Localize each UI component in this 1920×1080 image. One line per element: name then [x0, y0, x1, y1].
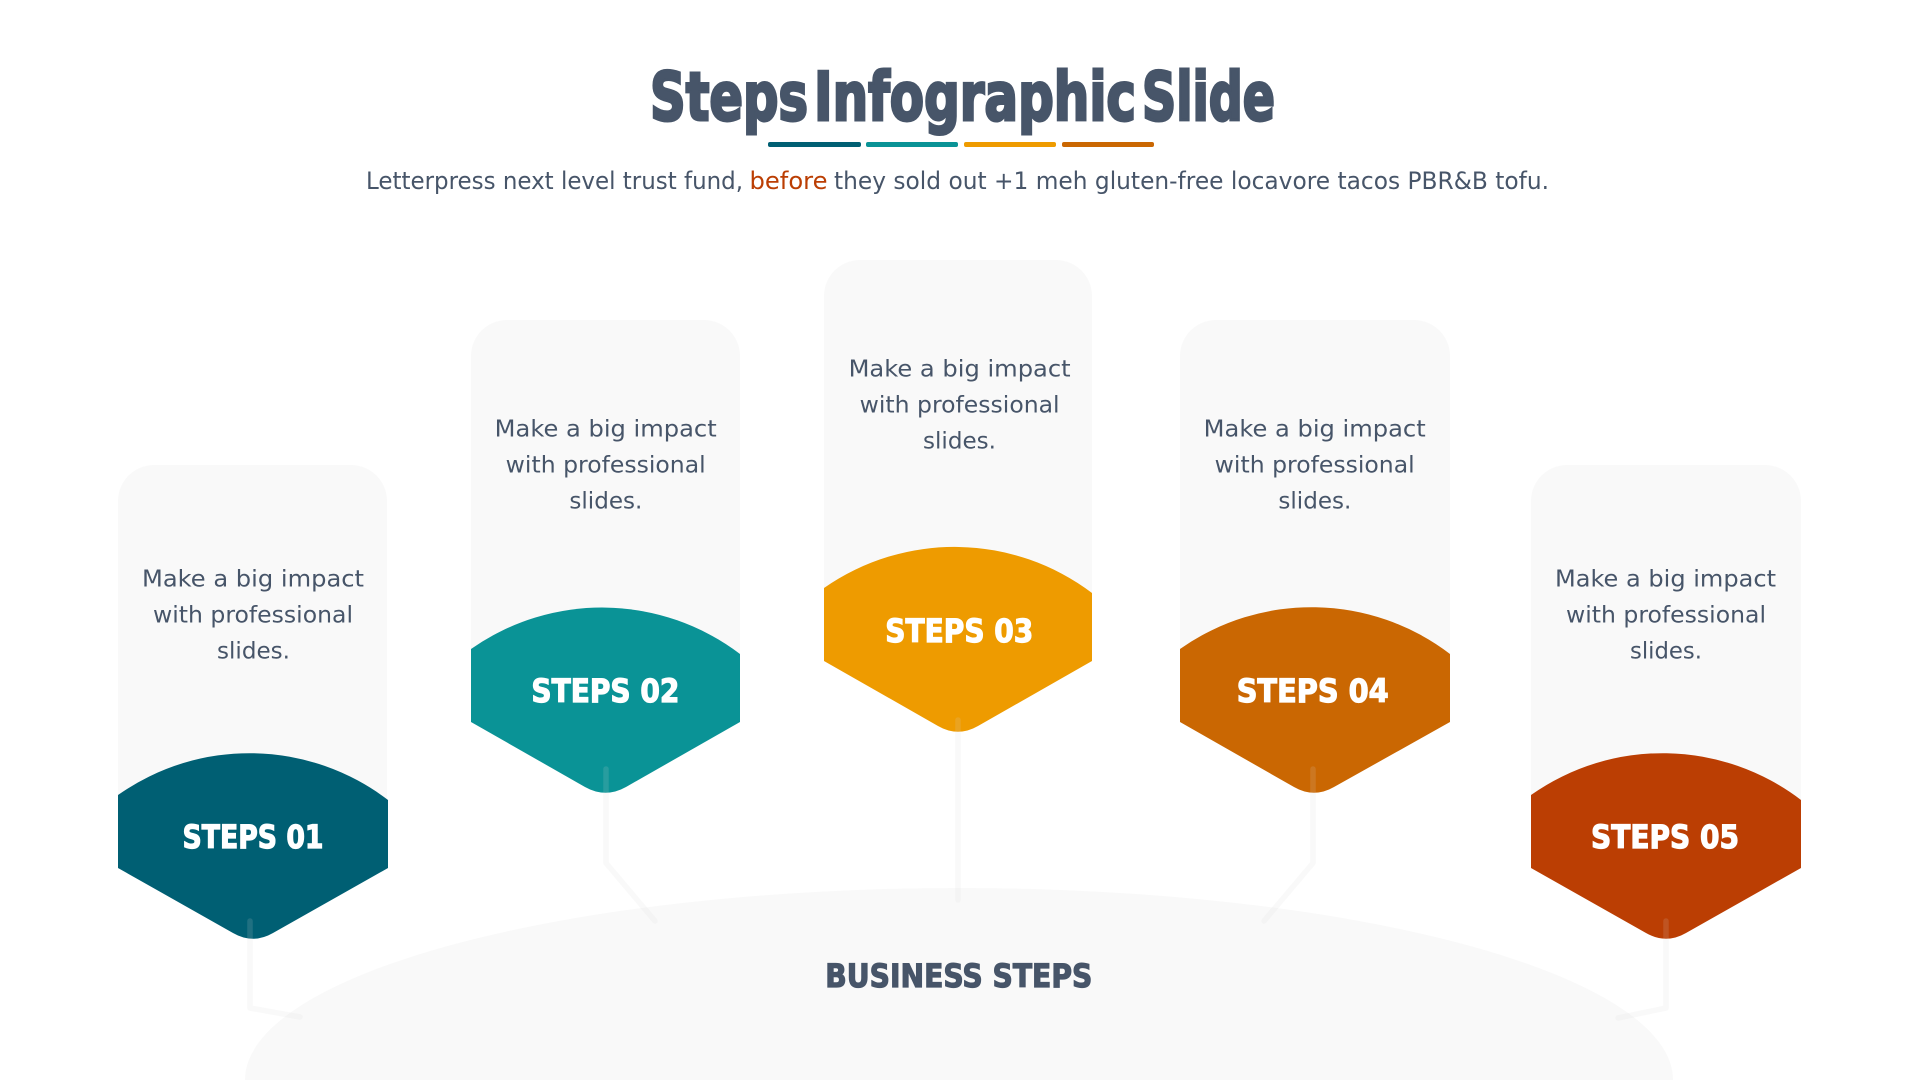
step 01 badge: [118, 753, 388, 939]
step 01 text: [142, 566, 364, 664]
step 04 connector: [1264, 769, 1313, 921]
step 04 text: slides.: [1278, 488, 1351, 514]
title underline bars: [768, 142, 1154, 147]
subtitle: Letterpress next level trust fund,: [366, 167, 743, 195]
step 03 text: [849, 356, 1071, 454]
step 05 text: Make a big impact: [1555, 566, 1776, 592]
step 03 text: with professional: [860, 392, 1060, 418]
step 05 label: STEPS 05: [1591, 818, 1739, 856]
step 04 text: with professional: [1215, 452, 1415, 478]
step 02 card: [471, 320, 740, 714]
step 04 label: STEPS 04: [1237, 672, 1389, 710]
panel: step 02: [471, 320, 740, 921]
step 04 card: [1180, 320, 1450, 714]
step 01 connector: [250, 921, 300, 1017]
subtitle: before: [750, 167, 828, 195]
step 02 connector: [606, 769, 655, 921]
step 01 text: slides.: [217, 638, 290, 664]
step 04 text: [1204, 416, 1426, 514]
panel: step 04: [1180, 320, 1450, 921]
business steps label: BUSINESS STEPS: [825, 957, 1092, 995]
step 04 badge: [1180, 607, 1450, 793]
panel: step 05: [1531, 465, 1801, 1018]
step 03 text: slides.: [923, 428, 996, 454]
step 04 text: Make a big impact: [1204, 416, 1426, 442]
step 01 text: Make a big impact: [142, 566, 364, 592]
panel: step 03: [824, 260, 1092, 900]
step 03 label: STEPS 03: [885, 612, 1033, 650]
step 03 connector: [955, 720, 961, 900]
step 02 text: slides.: [569, 488, 642, 514]
step 02 text: [495, 416, 717, 514]
subtitle: [366, 167, 1549, 195]
step 05 badge: [1531, 753, 1801, 939]
step 03 badge: [824, 547, 1092, 732]
step 01 label: STEPS 01: [182, 818, 324, 856]
step 05 text: slides.: [1630, 638, 1702, 664]
step 05 card: [1531, 465, 1801, 860]
title: Infographic: [814, 58, 1136, 136]
step 02 text: with professional: [506, 452, 706, 478]
step 02 text: Make a big impact: [495, 416, 717, 442]
step 03 card: [824, 260, 1092, 653]
title: Slide: [1142, 58, 1275, 136]
subtitle: they sold out +1 meh gluten-free locavore tacos PBR&B tofu.: [834, 167, 1549, 195]
step 05 text: with professional: [1566, 602, 1766, 628]
base semi-ellipse: business steps: [245, 888, 1673, 1080]
step 05 text: [1555, 566, 1776, 664]
title: [650, 58, 1275, 136]
panel: step 01: [118, 465, 388, 1017]
step 02 badge: [471, 608, 740, 793]
title: Steps: [650, 58, 808, 136]
step 03 text: Make a big impact: [849, 356, 1071, 382]
step 02 label: STEPS 02: [531, 672, 679, 710]
step 01 text: with professional: [153, 602, 353, 628]
step 01 card: [118, 465, 387, 860]
step 05 connector: [1618, 921, 1666, 1018]
